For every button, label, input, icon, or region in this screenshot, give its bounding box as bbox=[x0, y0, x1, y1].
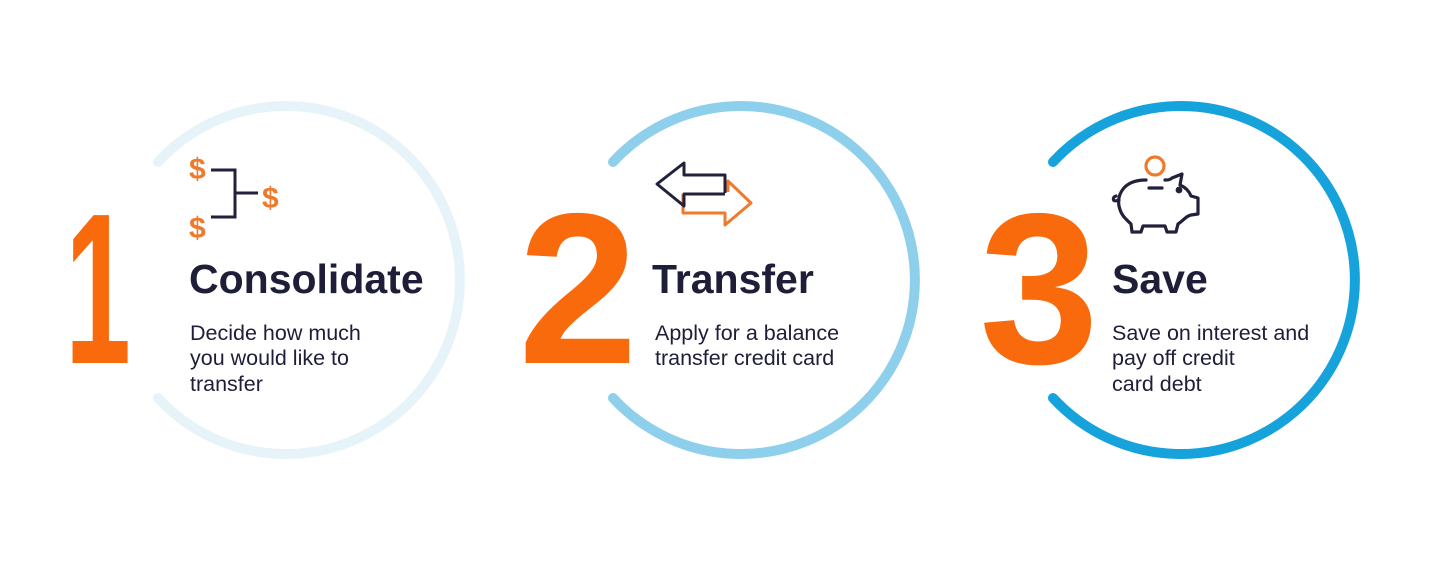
step 1: consolidate bbox=[65, 106, 460, 454]
icon: consolidate dollars: $ bbox=[189, 153, 206, 186]
icon: consolidate dollars bbox=[189, 153, 279, 245]
ring 3 bbox=[1053, 106, 1355, 454]
ring 1 bbox=[158, 106, 460, 454]
icon: transfer arrows bbox=[657, 163, 751, 225]
icon: piggy bank bbox=[1113, 157, 1198, 232]
body text 2: transfer credit card bbox=[655, 346, 834, 370]
number 1: 1 bbox=[65, 168, 131, 409]
heading: Consolidate: Consolidate bbox=[189, 256, 424, 302]
body text 3: Save on interest and bbox=[1112, 321, 1309, 345]
ring 2 bbox=[613, 106, 915, 454]
number 2: 2 bbox=[518, 168, 638, 409]
body text 1: transfer bbox=[190, 372, 263, 396]
heading: Save: Save bbox=[1112, 256, 1208, 302]
body text 1: you would like to bbox=[190, 346, 349, 370]
heading: Transfer: Transfer bbox=[652, 256, 814, 302]
step 3: save bbox=[979, 106, 1355, 454]
body text 3: card debt bbox=[1112, 372, 1202, 396]
body text 2: Apply for a balance bbox=[655, 321, 839, 345]
body text 3: pay off credit bbox=[1112, 346, 1235, 370]
step 2: transfer bbox=[518, 106, 915, 454]
body text 1: Decide how much bbox=[190, 321, 361, 345]
icon: consolidate dollars: $ bbox=[262, 182, 279, 215]
number 3: 3 bbox=[979, 168, 1099, 409]
icon: consolidate dollars: $ bbox=[189, 212, 206, 245]
